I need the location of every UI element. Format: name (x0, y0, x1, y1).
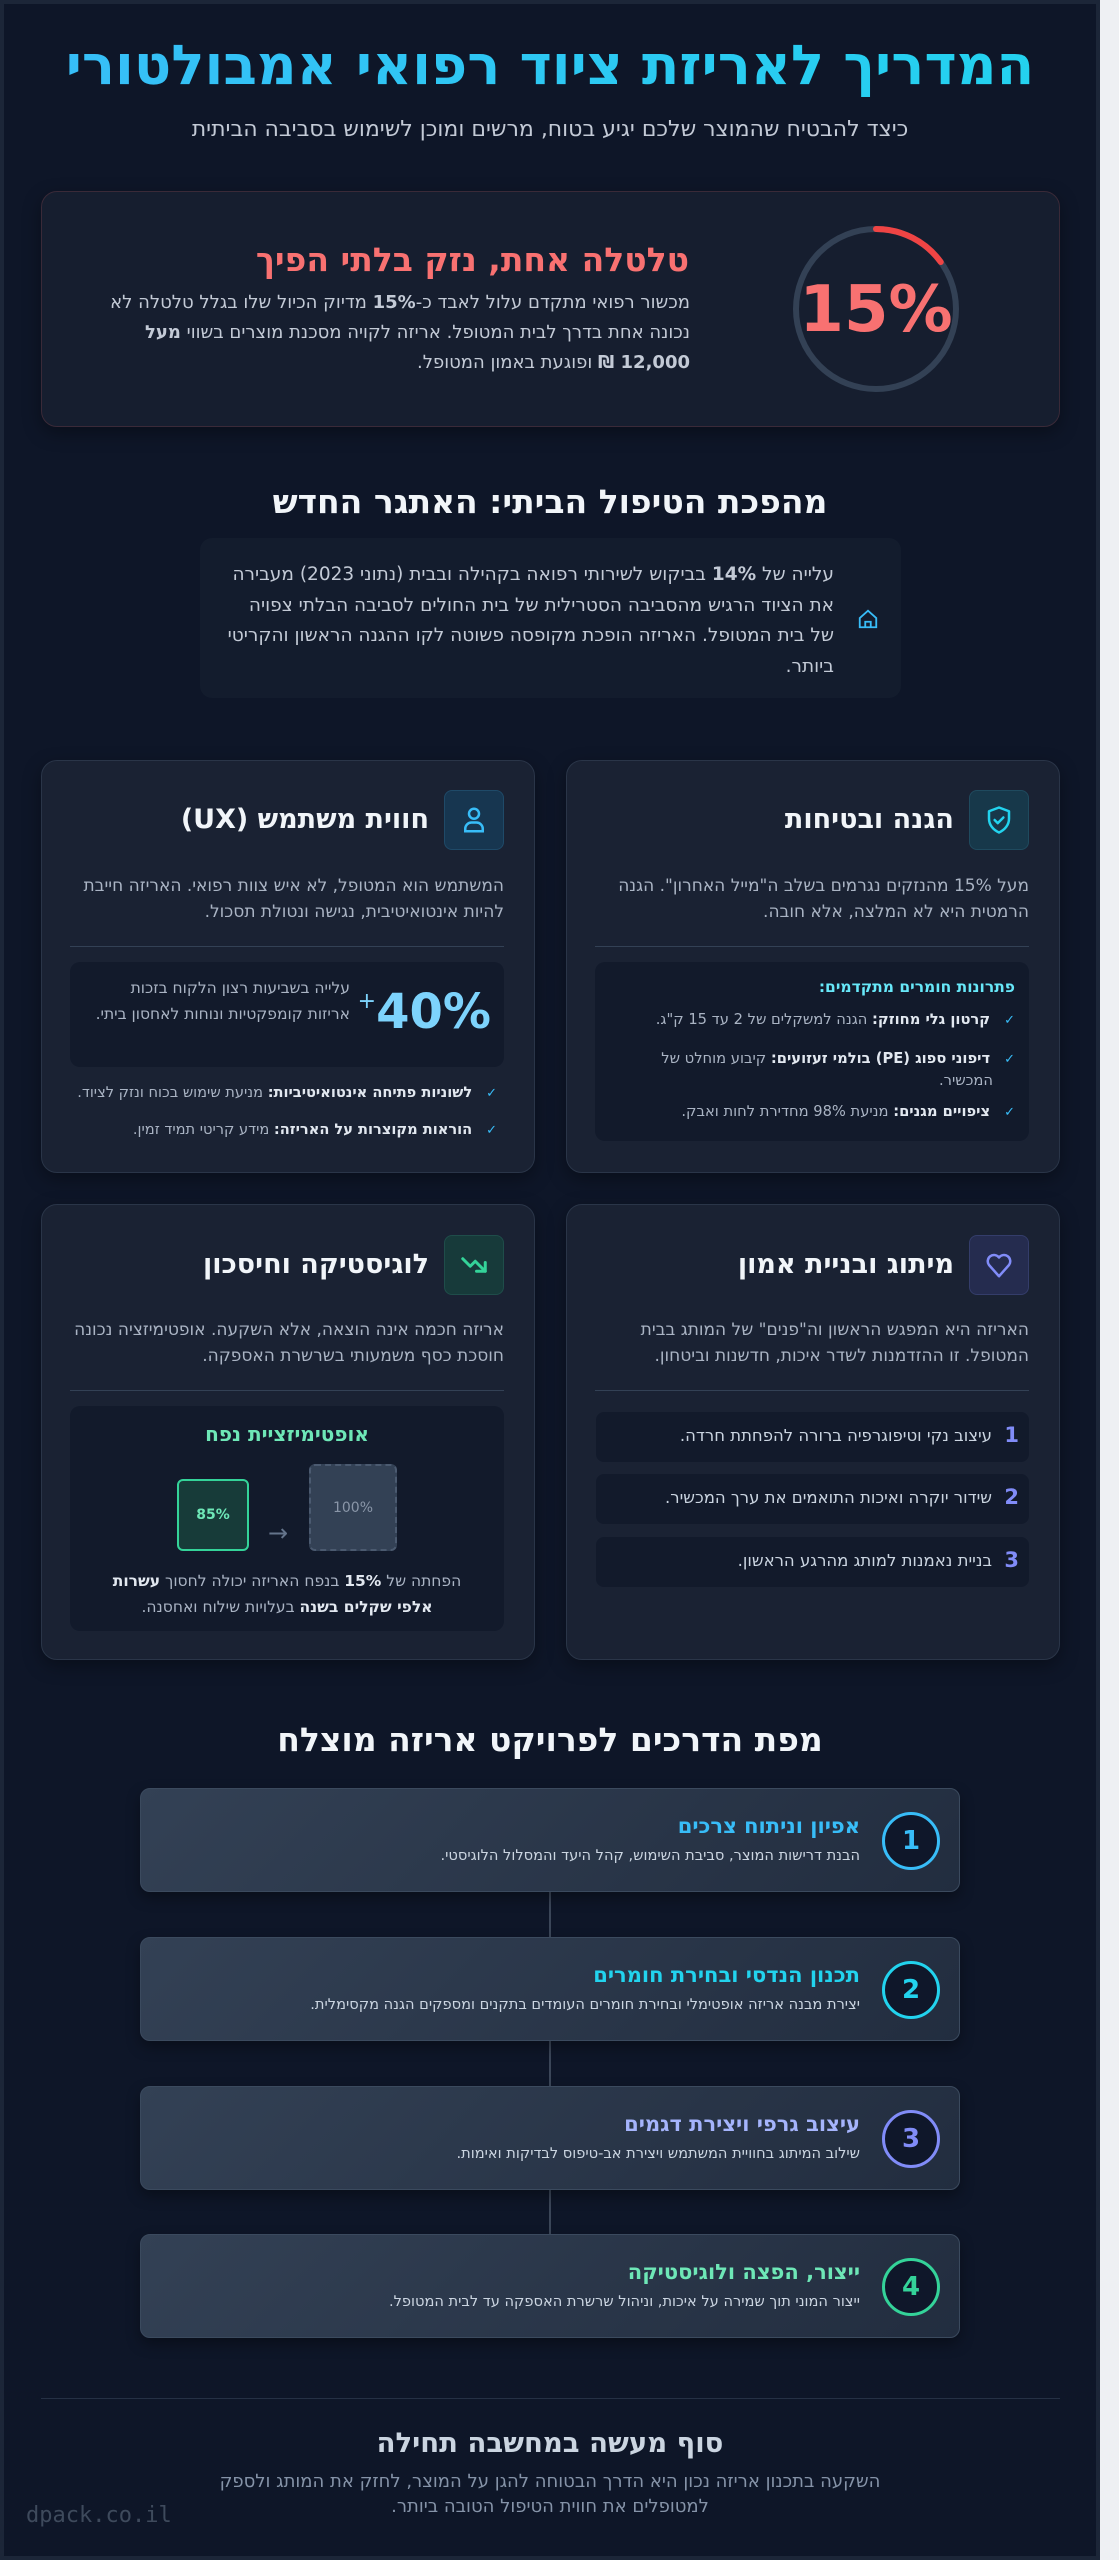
box 100% (309, 1464, 397, 1551)
step 3: 3 (902, 2124, 920, 2154)
icon: heart (969, 1235, 1029, 1295)
panel: user experience: ✓ הוראות מקוצרות על האריזה: מידע קריטי תמיד זמין. (133, 1121, 497, 1138)
step 1: אפיון וניתוח צרכים (678, 1814, 860, 1838)
trust list item 2: 2 (1004, 1485, 1019, 1509)
stat 40%: עלייה בשביעות רצון הלקוח בזכות אריזות קומפקטיות ונוחות לאחסון ביתי. (96, 979, 350, 1022)
box 85% (177, 1479, 249, 1551)
icon: home (858, 610, 878, 628)
panel: protection and safety (566, 760, 1060, 1173)
description: האריזה היא המפגש הראשון וה"פנים" של המותג בבית המטופל. זו ההזדמנות לשדר איכות, חדשנות וביטחון. (641, 1320, 1029, 1366)
heading: מיתוג ובניית אמון (738, 1249, 954, 1280)
heading: הגנה ובטיחות (785, 804, 954, 835)
bullets: ✓ לשוניות פתיחה אינטואיטיביות: מניעת שימוש בכוח ונזק לציוד. (77, 1084, 497, 1101)
description: אריזה חכמה אינה הוצאה, אלא השקעה. אופטימיזציה נכונה חוסכת כסף משמעותי בשרשרת האספקה. (74, 1320, 504, 1366)
materials list: פתרונות חומרים מתקדמים: (819, 978, 1015, 996)
box 85%: 85% (196, 1507, 230, 1523)
box 100%: 100% (333, 1500, 373, 1516)
step 1: 1 (902, 1826, 920, 1856)
icon: trend down (444, 1235, 504, 1295)
materials list: ✓ קרטון גלי מחוזק: הגנה למשקלים של 2 עד 15 ק"ג. (656, 1011, 1015, 1028)
step 4: 4 (902, 2272, 920, 2302)
trust list item 1 (596, 1412, 1029, 1462)
arrow: → (268, 1519, 288, 1547)
step 2: יצירת מבנה אריזה אופטימלי ובחירת חומרים העומדים בתקנים ומספקים הגנה מקסימלית. (310, 1996, 860, 2013)
step 4 (140, 2234, 960, 2338)
icon: user (444, 790, 504, 850)
title: המדריך לאריזת ציוד רפואי אמבולטורי (66, 33, 1034, 97)
volume optimization chart (70, 1406, 504, 1631)
step 2: 2 (902, 1975, 920, 2005)
step 2: תכנון הנדסי ובחירת חומרים (593, 1963, 860, 1987)
panel: alert 15% (41, 191, 1060, 427)
connector lines (549, 1892, 551, 2234)
info text: עלייה של 14% בביקוש לשירותי רפואה בקהילה ובבית (נתוני 2023) מעבירה את הציוד הרגיש מהסביבה הסטרילית של בית החולים לסביבה הבלתי צפויה של בית המטופל. האריזה הופכת מקופסה פשוטה לקו ההגנה הראשון והקריטי ביותר. (228, 564, 834, 676)
info box (200, 538, 901, 698)
volume optimization chart: הפחתה של 15% בנפח האריזה יכולה לחסוך עשרות אלפי שקלים בשנה בעלויות שילוח ואחסנה. (113, 1572, 461, 1616)
trust list item 3: בניית נאמנות למותג מהרגע הראשון. (738, 1551, 992, 1570)
volume optimization chart: אופטימיזציית נפח (205, 1422, 369, 1446)
step 4: ייצור המוני תוך שמירה על איכות, וניהול שרשרת האספקה עד לבית המטופל. (389, 2293, 860, 2310)
step 4: ייצור, הפצה ולוגיסטיקה (628, 2260, 860, 2284)
donut chart 15% (793, 226, 959, 392)
heading: חווית משתמש (UX) (181, 804, 429, 835)
trust list item 1: עיצוב נקי וטיפוגרפיה ברורה להפחתת חרדה. (680, 1426, 992, 1445)
trust list item 1: 1 (1004, 1423, 1019, 1447)
footer heading: סוף מעשה במחשבה תחילה (377, 2427, 723, 2459)
trust list item 3 (596, 1537, 1029, 1587)
step 3: שילוב המיתוג בחוויית המשתמש ויצירת אב-טיפוס לבדיקות ואימות. (457, 2145, 860, 2162)
footer text: השקעה בתכנון אריזה נכון היא הדרך הבטוחה להגן על המוצר, לחזק את המותג ולספק למטופלים את חווית הטיפול הטובה ביותר. (220, 2471, 880, 2517)
stat 40%: +40% (358, 984, 491, 1040)
alert text: מכשור רפואי מתקדם עלול לאבד כ-15% מדיוק הכיול שלו בגלל טלטלה לא נכונה אחת בדרך לבית המטופל. אריזה לקויה מסכנת מוצרים בשווי מעל 12,000 ₪ ופוגעת באמון המטופל. (110, 292, 690, 373)
alert heading: טלטלה אחת, נזק בלתי הפיך (256, 240, 689, 279)
heading: home care revolution: מהפכת הטיפול הביתי: האתגר החדש (273, 482, 827, 521)
trust list item 2: שידור יוקרה ואיכות התואמים את ערך המכשיר. (665, 1488, 992, 1507)
description: מעל 15% מהנזקים נגרמים בשלב ה"מייל האחרון". הגנה הרמטית היא לא המלצה, אלא חובה. (618, 876, 1029, 922)
step 2 (140, 1937, 960, 2041)
watermark: dpack.co.il (26, 2503, 172, 2528)
stat 40% (70, 962, 504, 1067)
heading: לוגיסטיקה וחיסכון (203, 1249, 429, 1280)
icon: shield (969, 790, 1029, 850)
subtitle: כיצד להבטיח שהמוצר שלכם יגיע בטוח, מרשים ומוכן לשימוש בסביבה הביתית (192, 117, 908, 142)
step 3 (140, 2086, 960, 2190)
step 1: הבנת דרישות המוצר, סביבת השימוש, קהל היעד והמסלול הלוגיסטי. (440, 1847, 860, 1864)
panel: user experience (41, 760, 535, 1173)
donut chart 15%: 15% (799, 273, 953, 347)
description: המשתמש הוא המטופל, לא איש צוות רפואי. האריזה חייבת להיות אינטואיטיבית, נגישה ונטולת תסכול. (83, 876, 504, 922)
materials list: ✓ דיפוני ספוג (PE) בולמי זעזועים: קיבוע מוחלט של המכשיר. (661, 1050, 1015, 1089)
panel: branding and trust (566, 1204, 1060, 1660)
panel: logistics and savings (41, 1204, 535, 1660)
materials list: ✓ ציפויים מגנים: מניעת 98% מחדירת לחות ואבק. (681, 1103, 1015, 1120)
trust list item 3: 3 (1004, 1548, 1019, 1572)
step 1 (140, 1788, 960, 1892)
heading: roadmap: מפת הדרכים לפרויקט אריזה מוצלח (277, 1720, 823, 1759)
trust list item 2 (596, 1474, 1029, 1524)
step 3: עיצוב גרפי ויצירת דגמים (624, 2112, 860, 2136)
materials list (595, 962, 1029, 1141)
